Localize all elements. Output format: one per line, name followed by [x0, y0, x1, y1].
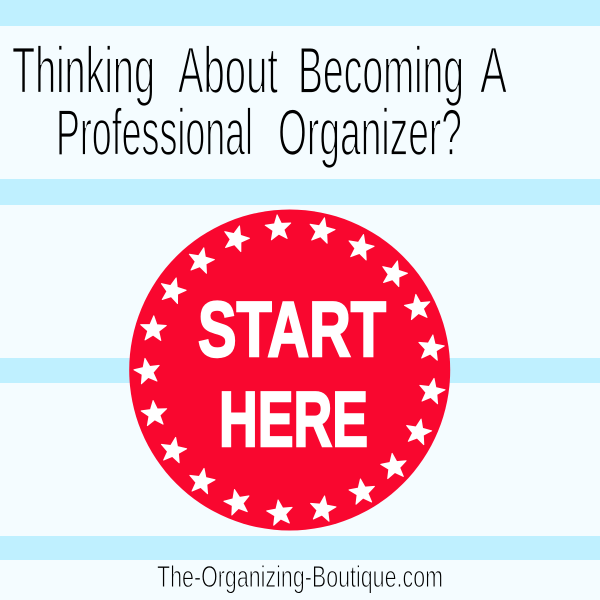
stripe: top	[0, 0, 600, 26]
badge text: here: HERE	[219, 375, 368, 463]
title	[12, 33, 507, 169]
badge circle	[129, 210, 450, 530]
stripe: upper	[0, 179, 600, 205]
footer website: The-Organizing-Boutique.com	[157, 559, 443, 594]
stripe: bottom	[0, 536, 600, 560]
title: A	[480, 33, 507, 107]
ring of stars	[132, 214, 447, 526]
title: Professional	[56, 95, 253, 169]
badge text: start: START	[198, 285, 386, 373]
title: Thinking	[12, 33, 155, 107]
title: Organizer?	[278, 95, 462, 169]
stripe: middle	[0, 358, 600, 383]
badge: start here	[129, 210, 450, 530]
title: Becoming	[298, 33, 464, 107]
title: About	[178, 33, 278, 107]
